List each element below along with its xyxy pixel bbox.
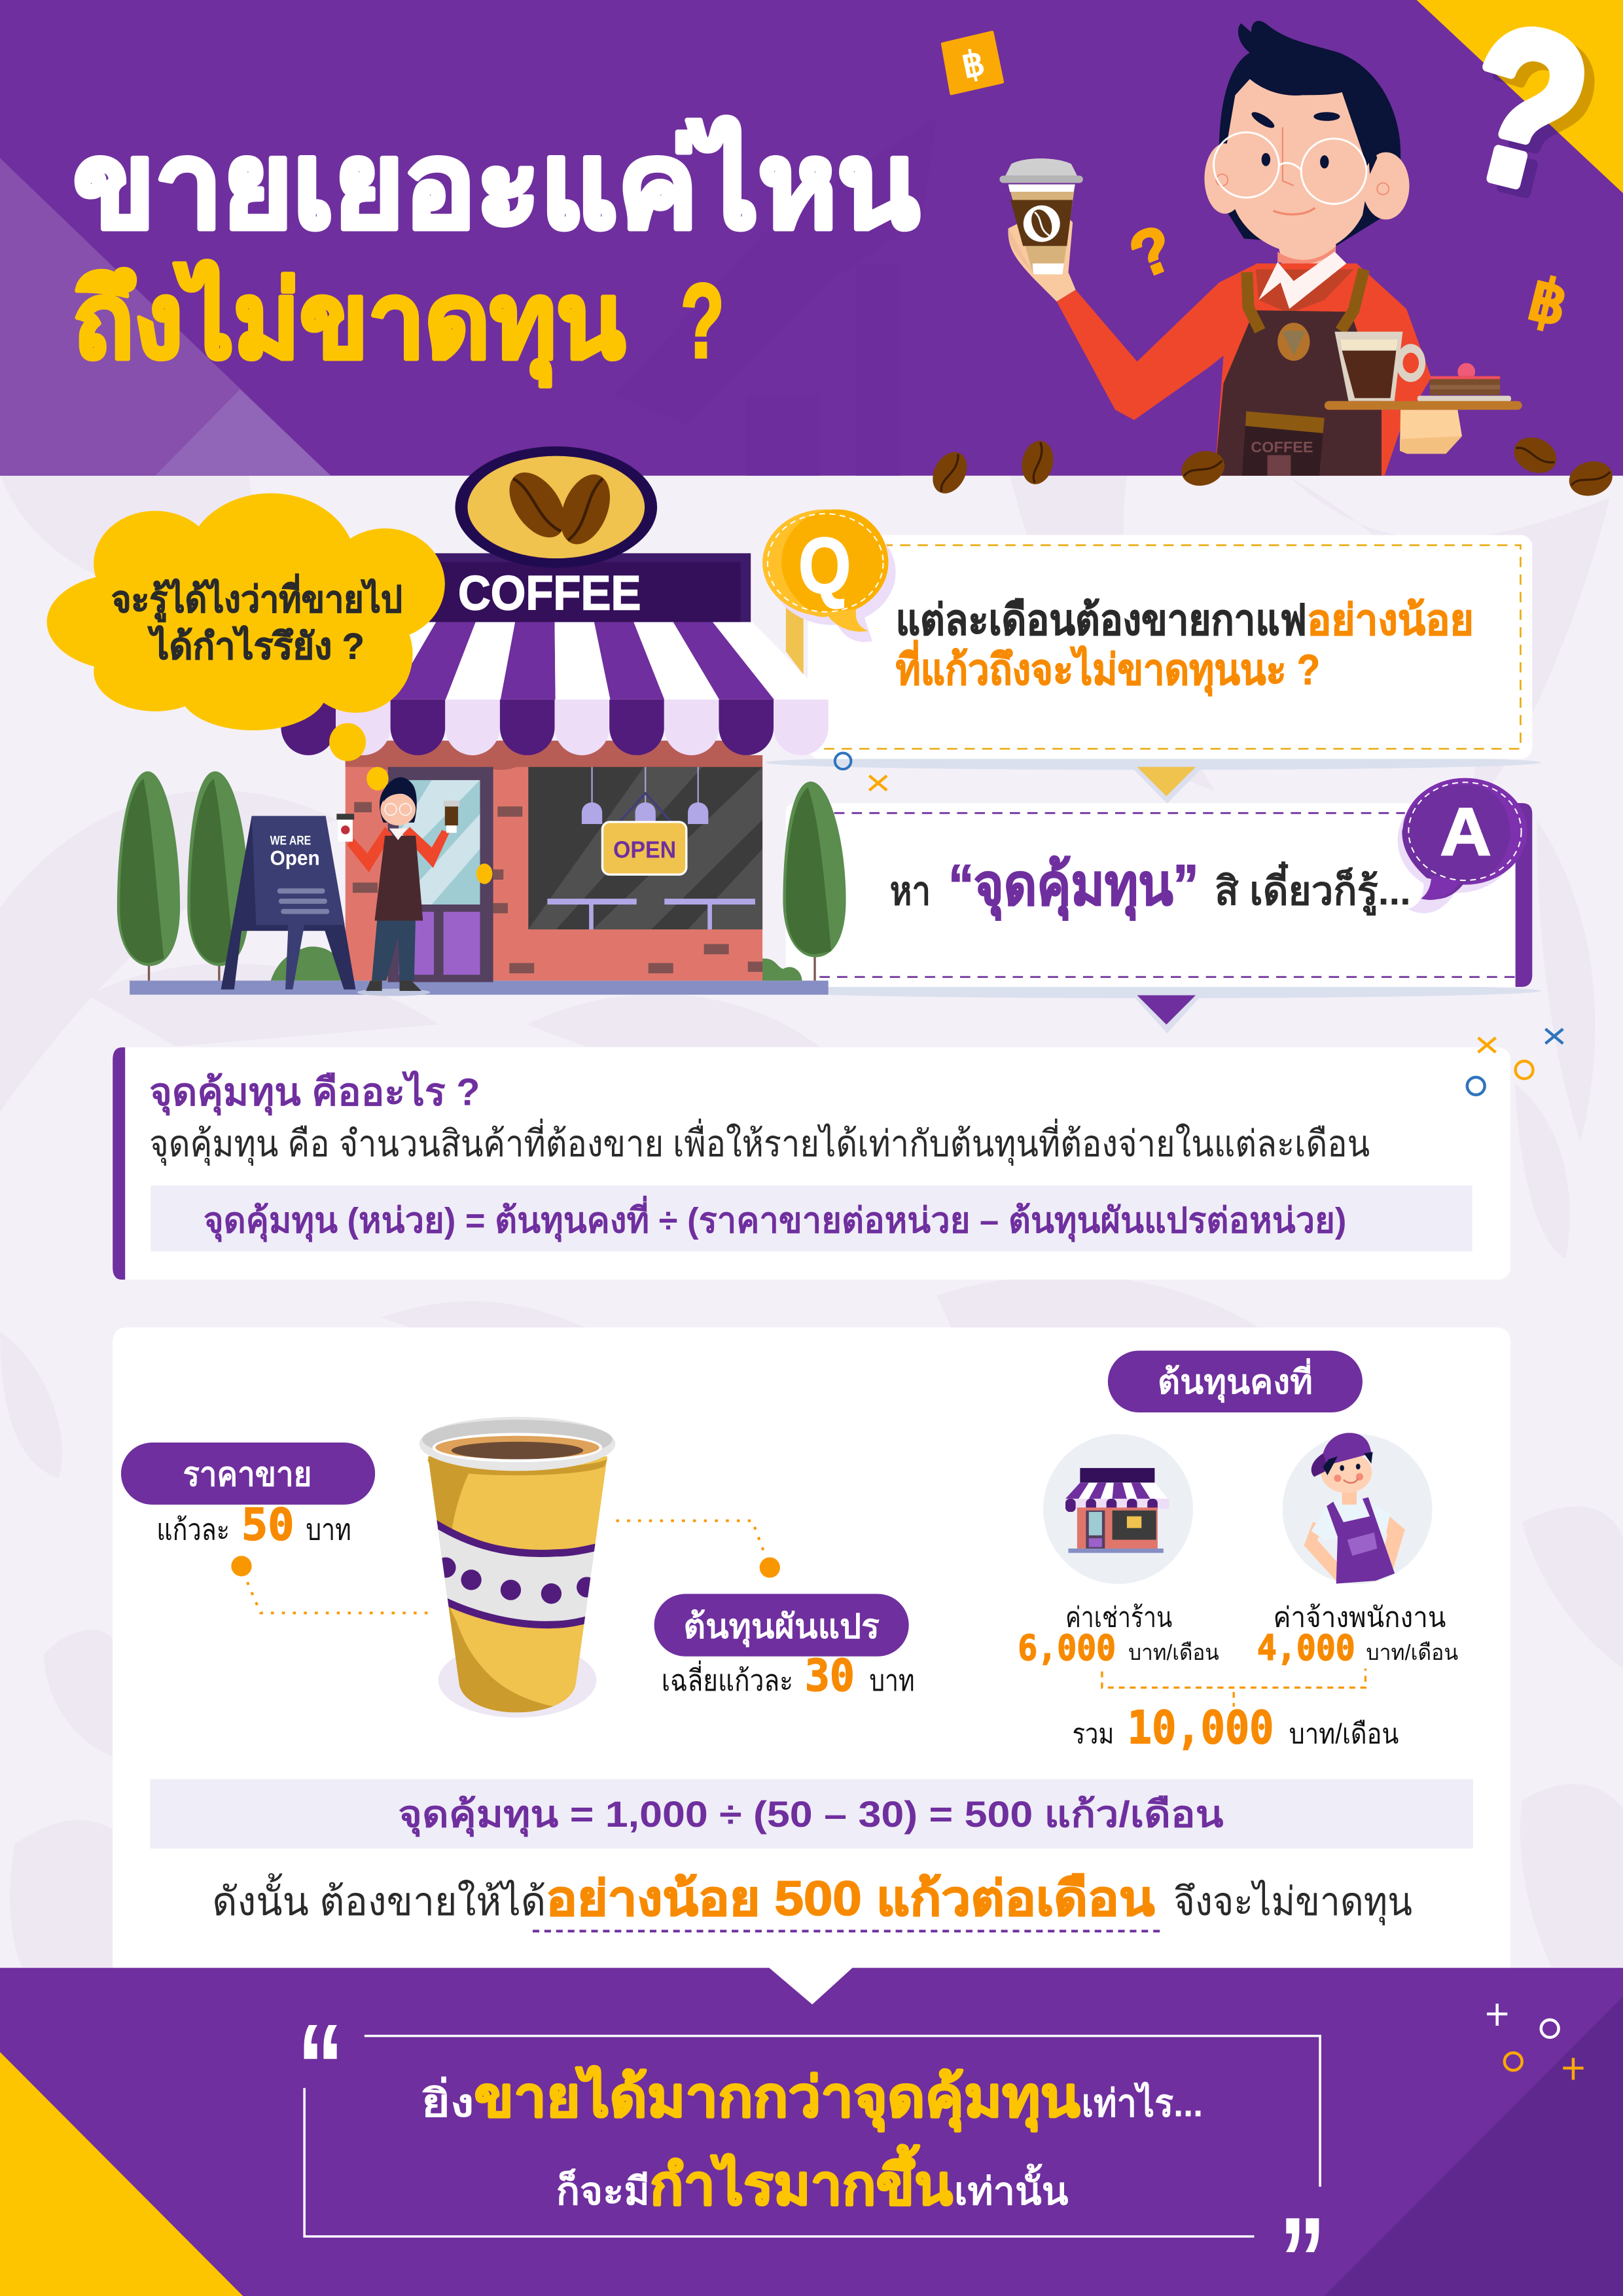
selling price value: แก้วละ	[156, 1515, 230, 1547]
answer text: หา	[890, 869, 931, 913]
panel: answer	[766, 803, 1541, 1033]
conclusion text	[212, 1871, 1412, 1926]
panel: question	[766, 535, 1541, 804]
rent label: ค่าเช่าร้าน	[1065, 1603, 1172, 1634]
connector arrow purple	[1132, 994, 1203, 1033]
scallop shade	[346, 741, 762, 770]
barista illustration	[999, 21, 1522, 476]
arm under tray	[1400, 410, 1462, 454]
confetti: definition panel	[1467, 1029, 1563, 1095]
apron	[1215, 310, 1382, 476]
icon: orange bitcoin: ฿	[1522, 266, 1574, 338]
cups	[338, 819, 353, 842]
definition body: จุดคุ้มทุน คือ จำนวนสินค้าที่ต้องขาย เพื่อให้รายได้เท่ากับต้นทุนที่ต้องจ่ายในแต่ละเดือน	[149, 1119, 1370, 1166]
definition heading: จุดคุ้มทุน คืออะไร ?	[149, 1069, 480, 1116]
takeaway cup	[999, 158, 1083, 274]
header band	[0, 0, 1623, 476]
selling price pill: ราคาขาย	[183, 1455, 312, 1493]
quote mark open: “	[297, 1999, 344, 2133]
icon: A speech bubble: A	[1440, 794, 1491, 869]
window	[528, 767, 762, 929]
eyes and brows	[1249, 109, 1340, 168]
variable cost value: บาท	[869, 1665, 915, 1697]
title	[73, 117, 919, 387]
formula box: จุดคุ้มทุน (หน่วย) = ต้นทุนคงที่ ÷ (ราคาขายต่อหน่วย – ต้นทุนผันแปรต่อหน่วย)	[204, 1195, 1346, 1242]
apron	[374, 836, 423, 921]
title: ?	[681, 262, 724, 380]
answer text	[890, 853, 1411, 921]
variable cost pill	[654, 1594, 909, 1657]
icon: staff person	[1283, 1433, 1433, 1584]
variable cost value: 30	[805, 1650, 855, 1701]
door	[388, 767, 493, 982]
selling price value: 50	[241, 1499, 294, 1551]
hair	[1219, 21, 1400, 246]
hand	[1008, 205, 1076, 302]
arms	[1304, 1522, 1358, 1581]
quote text line 2: กำไรมากขึ้น	[650, 2144, 953, 2217]
legs	[372, 915, 416, 980]
quote frame	[304, 2036, 1320, 2236]
icon: Q speech bubble	[762, 509, 896, 675]
cake	[1418, 363, 1511, 402]
total value: บาท/เดือน	[1289, 1719, 1399, 1749]
formula box	[151, 1185, 1472, 1251]
tree right	[783, 781, 846, 980]
sandwich board: Open	[270, 847, 320, 870]
nose and smile	[1274, 128, 1315, 215]
awning stripes	[281, 622, 829, 700]
cloud text: จะรู้ได้ไงว่าที่ขายไป	[111, 573, 402, 622]
small confetti marks	[835, 753, 887, 791]
icon: Q speech bubble: Q	[798, 522, 851, 610]
tray	[1325, 401, 1522, 410]
rent value: 6,000	[1018, 1627, 1116, 1668]
coffee sign board: COFFEE	[458, 565, 641, 620]
selling price value	[156, 1499, 351, 1551]
answer text: สิ เดี๋ยวก็รู้...	[1215, 861, 1411, 916]
coffee shop illustration	[117, 446, 846, 996]
question text: ที่แก้วถึงจะไม่ขาดทุนนะ ?	[896, 639, 1320, 696]
variable cost value	[662, 1650, 915, 1701]
rent value	[1018, 1627, 1219, 1668]
cup rim	[419, 1417, 615, 1475]
wage value	[1257, 1627, 1458, 1668]
open sign: OPEN	[613, 836, 676, 863]
icon: small orange question mark: ?	[1120, 211, 1183, 292]
cloud text: ได้กำไรรึยัง ?	[147, 624, 365, 666]
variable cost pill: ต้นทุนผันแปร	[683, 1607, 880, 1647]
sandwich board	[221, 816, 355, 990]
coffee beans row	[926, 431, 1616, 501]
answer text: “จุดคุ้มทุน”	[948, 853, 1198, 921]
total value: 10,000	[1128, 1702, 1274, 1754]
coffee cup illustration	[417, 1417, 622, 1720]
ears	[1204, 143, 1245, 213]
sleeves	[347, 827, 450, 872]
coffee sign board	[429, 553, 751, 622]
face	[1226, 79, 1370, 254]
question text: แต่ละเดือนต้องขายกาแฟ	[896, 596, 1307, 643]
apron straps	[1247, 269, 1364, 331]
ear marks	[1216, 174, 1389, 194]
panel: worked example	[113, 1327, 1510, 1976]
conclusion text: ดังนั้น ต้องขายให้ได้	[212, 1873, 546, 1924]
shirt and arm	[1057, 264, 1431, 476]
icon: big question mark	[1482, 26, 1594, 198]
finger overlay	[1008, 228, 1035, 275]
title: ขายเยอะแค่ไหน	[73, 117, 919, 253]
icon: rent shop	[1043, 1434, 1193, 1584]
calculation band: จุดคุ้มทุน = 1,000 ÷ (50 – 30) = 500 แก้ว/เดือน	[398, 1793, 1224, 1837]
quote text line 1: ขายได้มากกว่าจุดคุ้มทุน	[474, 2066, 1080, 2132]
cloud text	[111, 573, 402, 666]
fixed cost pill: ต้นทุนคงที่	[1158, 1358, 1313, 1403]
question text	[896, 596, 1474, 696]
selling price pill	[121, 1443, 375, 1505]
total value	[1072, 1702, 1399, 1754]
wage value: บาท/เดือน	[1366, 1641, 1458, 1665]
calculation band	[150, 1779, 1473, 1848]
ground	[130, 980, 829, 995]
glasses	[1214, 132, 1366, 204]
apron badge	[1277, 323, 1310, 361]
total value: รวม	[1072, 1719, 1114, 1749]
light triangle left	[0, 158, 330, 476]
sandwich board: WE ARE	[270, 834, 311, 848]
question text: อย่างน้อย	[1307, 596, 1474, 643]
cloud lobes	[47, 493, 445, 791]
collar	[1258, 252, 1346, 309]
selling price value: บาท	[306, 1515, 351, 1547]
conclusion text: อย่างน้อย 500 แก้วต่อเดือน	[546, 1871, 1154, 1926]
coffee bag	[1242, 411, 1325, 476]
shirt	[1311, 1499, 1390, 1540]
collar	[389, 829, 407, 840]
quote text line 1	[421, 2066, 1203, 2132]
quote text line 1: เท่าไร...	[1082, 2081, 1203, 2125]
head	[1321, 1452, 1372, 1493]
coffee bean emblem	[455, 446, 657, 568]
head	[380, 778, 417, 823]
trees left	[117, 772, 249, 980]
footer band	[0, 1967, 1623, 2296]
quote text line 2	[556, 2144, 1069, 2217]
connector right	[616, 1520, 780, 1578]
panel: definition	[113, 1047, 1510, 1280]
neck	[1277, 242, 1336, 278]
connector left	[231, 1556, 429, 1613]
wage value: 4,000	[1257, 1627, 1355, 1668]
fixed cost pill	[1108, 1351, 1363, 1412]
footer confetti	[1487, 2003, 1584, 2080]
rent value: บาท/เดือน	[1128, 1641, 1219, 1665]
icon: bitcoin tile: ฿	[958, 43, 988, 86]
bricks	[353, 802, 762, 973]
small barista	[336, 778, 459, 996]
open sign	[602, 793, 687, 874]
wage label: ค่าจ้างพนักงาน	[1274, 1603, 1446, 1634]
quote text line 2: เท่านั้น	[954, 2163, 1069, 2213]
apron	[1327, 1498, 1395, 1584]
icon: bitcoin tile	[942, 32, 1003, 94]
icon: A speech bubble	[1398, 778, 1527, 913]
building wall	[346, 755, 762, 980]
title: ถึงไม่ขาดทุน	[73, 261, 625, 387]
total bracket	[1102, 1668, 1365, 1706]
conclusion underline	[533, 1931, 1165, 1932]
connector arrow yellow	[1132, 767, 1203, 804]
bushes	[271, 946, 802, 980]
glass of coffee	[1334, 332, 1425, 401]
coffee bag: COFFEE	[1251, 439, 1313, 456]
conclusion text: จึงจะไม่ขาดทุน	[1173, 1879, 1412, 1926]
variable cost value: เฉลี่ยแก้วละ	[662, 1660, 793, 1697]
awning valance	[281, 700, 829, 755]
quote text line 2: ก็จะมี	[556, 2168, 650, 2213]
panel shadow	[766, 755, 1541, 770]
thought cloud	[47, 493, 445, 791]
quote text line 1: ยิ่ง	[421, 2077, 474, 2125]
